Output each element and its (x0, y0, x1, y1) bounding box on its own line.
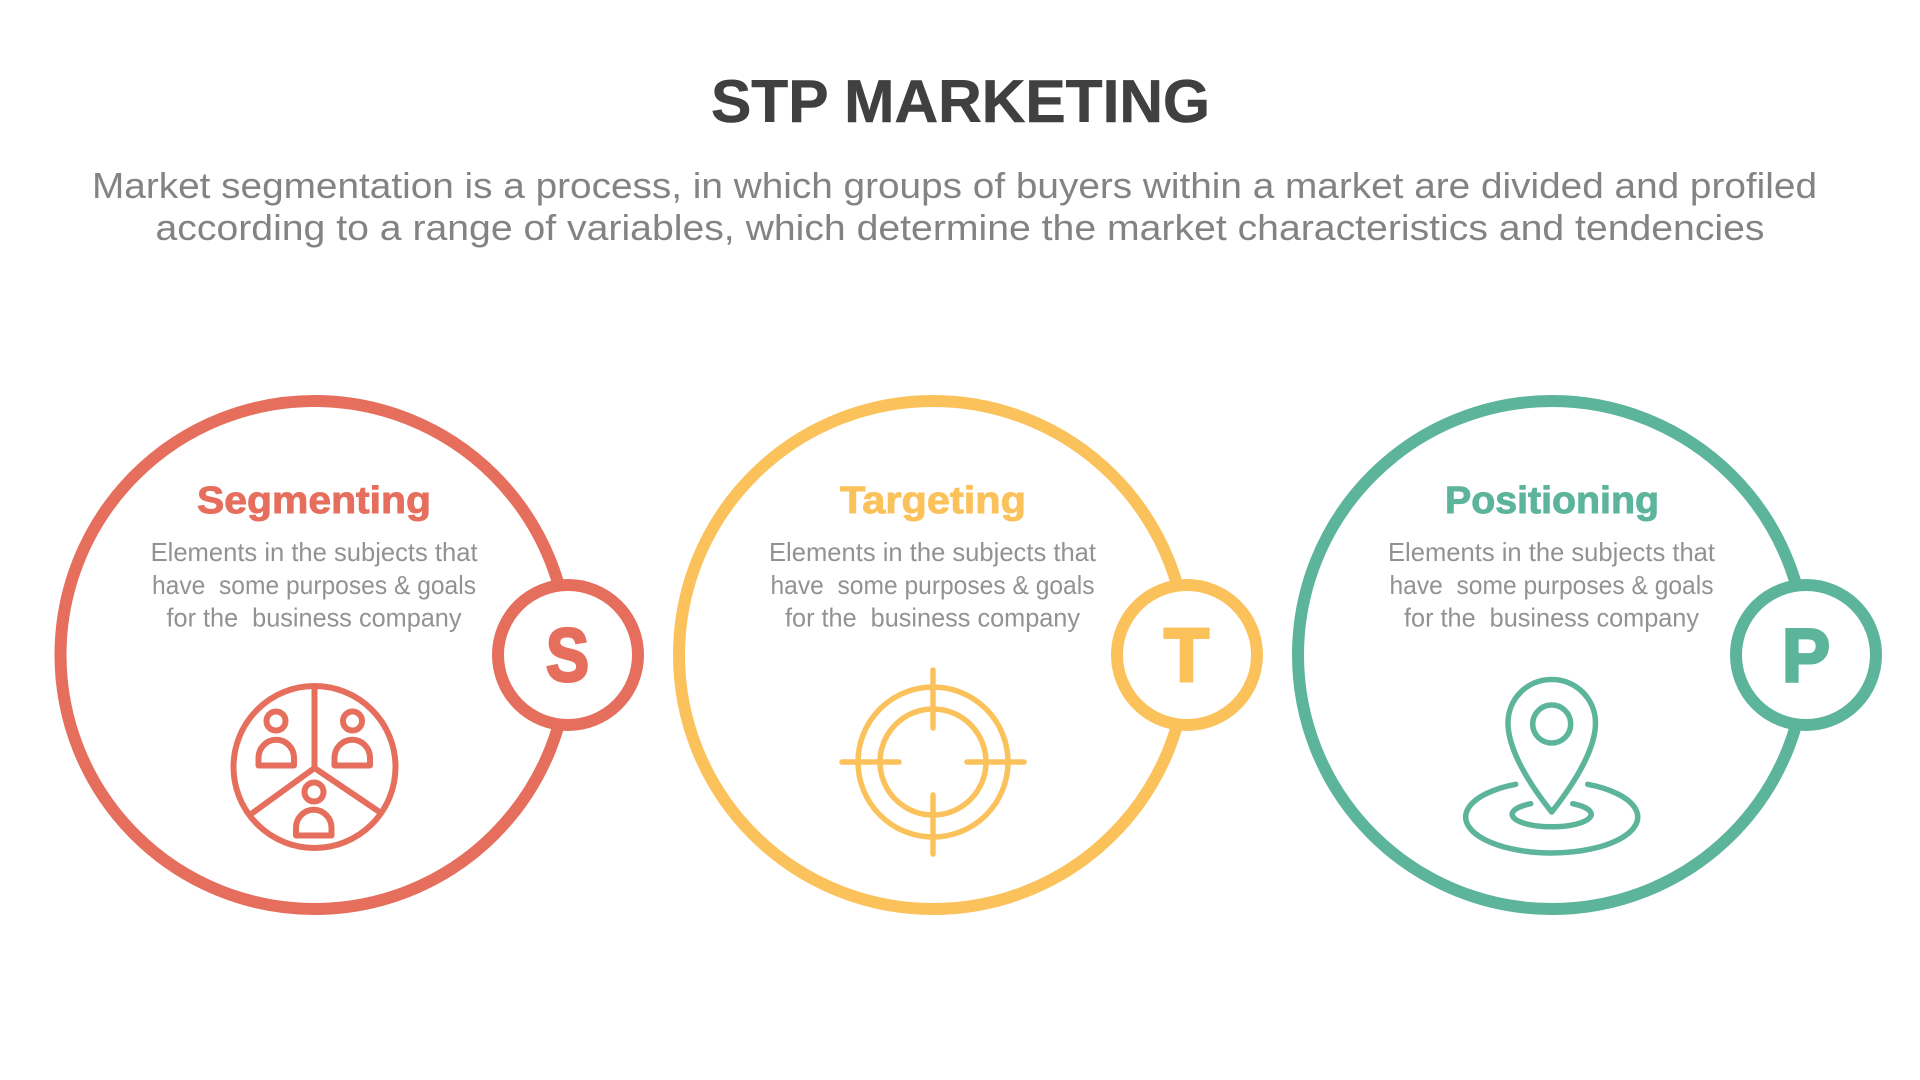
description: segmenting: have some purposes & goals (152, 570, 476, 600)
description: positioning: have some purposes & goals (1390, 570, 1714, 600)
description: targeting (769, 537, 1097, 632)
icon: target crosshair (842, 670, 1024, 854)
badge: P: P (1782, 613, 1830, 697)
heading: segmenting: Segmenting (197, 480, 431, 522)
large ring: targeting (679, 401, 1187, 909)
description: targeting: for the business company (785, 602, 1080, 632)
panel: segmenting (60, 401, 638, 909)
icon: segmented people pie (234, 686, 396, 848)
icon: location pin (1466, 680, 1638, 853)
subtitle text block: Market segmentation is a process, in which groups of buyers within a market are divided and profiled (92, 165, 1817, 206)
badge: T (1117, 585, 1257, 725)
description: segmenting: for the business company (166, 602, 462, 632)
description: positioning: for the business company (1404, 602, 1699, 632)
description: positioning: Elements in the subjects that (1388, 537, 1716, 567)
heading: targeting: Targeting (840, 480, 1026, 522)
title: STP MARKETING (711, 68, 1210, 135)
description: positioning (1388, 537, 1716, 632)
badge: S (498, 585, 638, 725)
subtitle text block: according to a range of variables, which determine the market characteristics and tendencies (156, 207, 1764, 248)
badge: T: T (1164, 613, 1209, 697)
badge: S: S (546, 613, 589, 697)
description: targeting: have some purposes & goals (770, 570, 1094, 600)
large ring: positioning (1298, 401, 1806, 909)
subtitle text block (92, 165, 1817, 248)
panel: targeting (679, 401, 1257, 909)
description: targeting: Elements in the subjects that (769, 537, 1097, 567)
description: segmenting: Elements in the subjects that (151, 537, 478, 567)
panel: positioning (1298, 401, 1876, 909)
heading: positioning: Positioning (1445, 480, 1659, 522)
description: segmenting (151, 537, 478, 632)
badge: P (1736, 585, 1876, 725)
large ring: segmenting (60, 401, 568, 909)
